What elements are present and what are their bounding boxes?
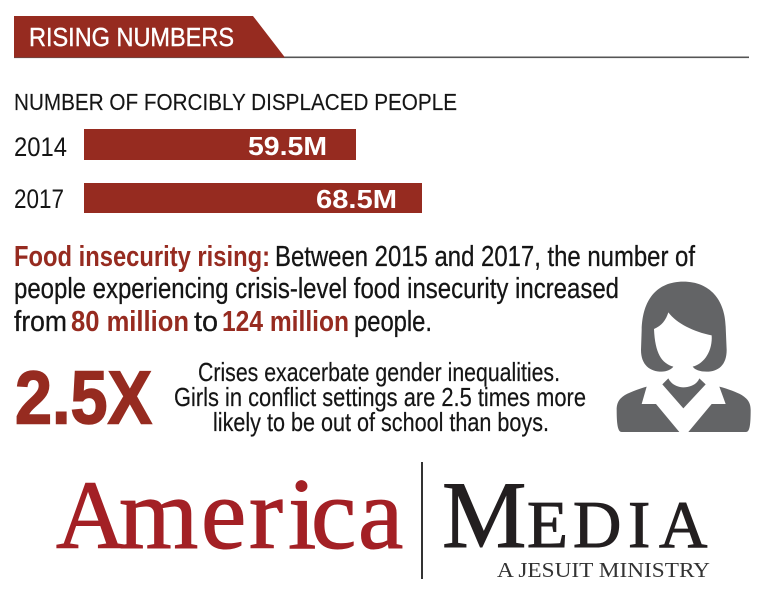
logo wordmark: Media: E: [527, 488, 568, 562]
icon: woman: [617, 282, 751, 432]
bar row 2017: 68.5M: [316, 186, 397, 214]
bar row 2014: [14, 129, 356, 162]
text block: food insecurity: from: [14, 306, 67, 338]
logo wordmark: America: i: [288, 458, 316, 571]
text block: gender inequalities: Crises exacerbate gender inequalities.: [198, 357, 560, 387]
section header: rising numbers: RISING NUMBERS: [29, 22, 234, 52]
text block: gender inequalities: likely to be out of school than boys.: [213, 407, 549, 437]
text block: food insecurity: 80 million: [71, 306, 189, 338]
bar chart: displaced people: [14, 129, 422, 214]
text block: food insecurity: [14, 241, 696, 338]
logo wordmark: Media: D: [573, 488, 621, 562]
logo wordmark: America: e: [201, 458, 246, 571]
text block: food insecurity: people experiencing crisis-level food insecurity increased: [14, 273, 619, 305]
section header: rising numbers: [14, 16, 749, 58]
logo: America Media: [56, 458, 710, 582]
text block: gender inequalities: [174, 357, 586, 437]
bar row 2017: [14, 183, 422, 214]
chart heading: NUMBER OF FORCIBLY DISPLACED PEOPLE: [14, 89, 457, 115]
logo wordmark: America: m: [119, 458, 198, 571]
text block: food insecurity: 124 million: [222, 306, 349, 338]
text block: food insecurity: people.: [354, 306, 432, 338]
logo wordmark: America: r: [249, 458, 283, 571]
logo divider: [421, 462, 423, 579]
logo wordmark: America: c: [311, 458, 356, 571]
logo wordmark: Media: I: [628, 488, 650, 562]
big statistic: 2.5X: 2.5X: [15, 356, 152, 440]
bar row 2014: 59.5M: [248, 133, 327, 161]
text block: food insecurity: Food insecurity rising:: [14, 241, 270, 273]
bar row 2017: 2017: [14, 184, 64, 214]
text block: gender inequalities: Girls in conflict settings are 2.5 times more: [174, 382, 586, 412]
logo wordmark: Media: M: [442, 462, 526, 568]
logo wordmark: America: A: [56, 462, 126, 569]
logo wordmark: America: a: [358, 458, 403, 571]
logo wordmark: Media: A: [659, 488, 707, 562]
logo tagline: A JESUIT MINISTRY: [497, 558, 710, 582]
bar row 2014: 2014: [14, 132, 67, 162]
text block: food insecurity: to: [194, 306, 218, 338]
